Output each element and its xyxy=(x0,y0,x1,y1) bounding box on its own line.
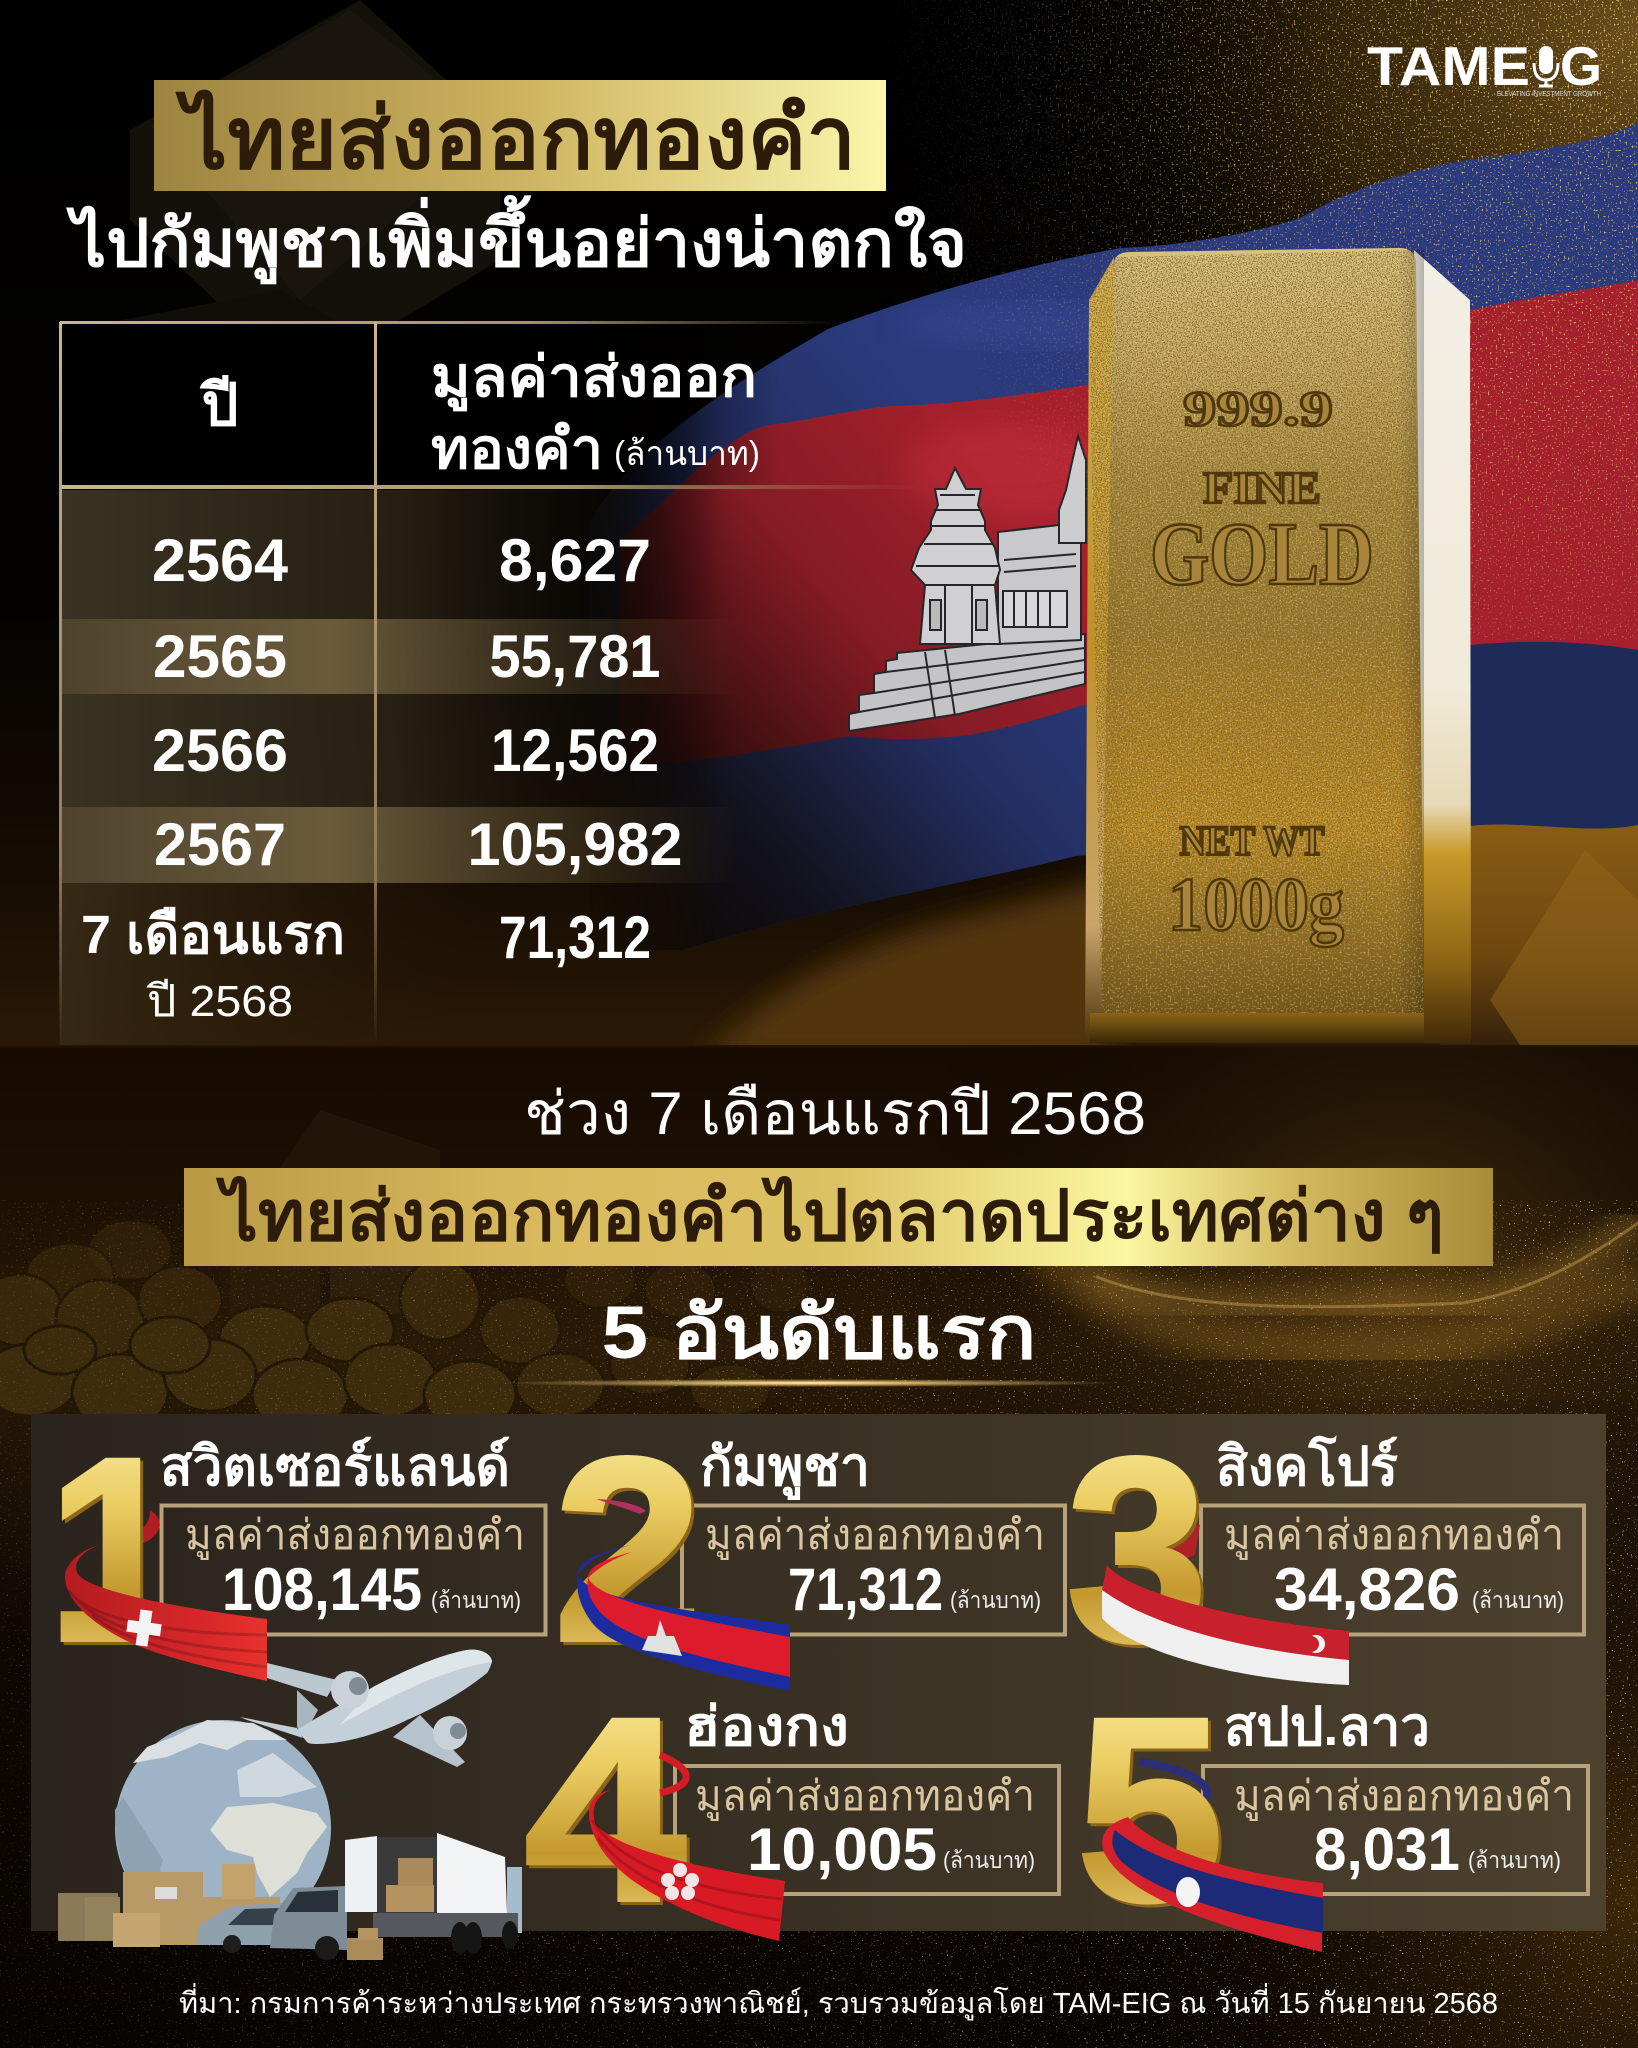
rank 2 Cambodia: 2 xyxy=(553,1403,703,1696)
logo TAMEIG: G xyxy=(1560,35,1602,97)
bar stamp text: GOLD xyxy=(1150,505,1374,604)
gold dust lower xyxy=(0,1200,1638,2048)
illustration: globe, plane, cargo and trucks xyxy=(58,1650,522,1960)
divider glow xyxy=(500,1379,1120,1387)
bar stamp text: NET WT xyxy=(1180,819,1324,865)
rank 1 Switzerland xyxy=(47,1403,546,1699)
logo TAMEIG xyxy=(1367,35,1602,98)
row first 7 months 2568 xyxy=(81,904,651,1026)
red field xyxy=(620,280,1638,765)
rank 1 Switzerland: 108,145 xyxy=(222,1556,422,1623)
row 2565: 2565 xyxy=(153,623,287,690)
source note: ที่มา: กรมการค้าระหว่างประเทศ กระทรวงพาณิชย์, รวบรวมข้อมูลโดย TAM-EIG ณ วันที่ 15 กันยายน 2568 xyxy=(179,1983,1498,2021)
rank 5 Laos: 5 xyxy=(1079,1666,1227,1959)
cardboard boxes xyxy=(58,1864,280,1947)
table header: ปี xyxy=(199,373,238,438)
van xyxy=(270,1886,347,1960)
rank 5 Laos: 8,031 xyxy=(1314,1816,1460,1883)
table header: ทองคำ xyxy=(431,417,603,480)
rank 5 Laos xyxy=(1076,1663,1588,1959)
row 2564: 8,627 xyxy=(499,527,651,594)
row 2566: 2566 xyxy=(152,717,288,784)
wave light on right xyxy=(1045,1223,1638,1350)
globe xyxy=(115,1720,331,1936)
rank 1 Switzerland: (ล้านบาท) xyxy=(431,1587,521,1613)
row first 7 months 2568: ปี 2568 xyxy=(146,977,293,1026)
rank 4 Hong Kong: (ล้านบาท) xyxy=(943,1847,1035,1873)
row 2566: 12,562 xyxy=(491,717,659,784)
row 2564 xyxy=(152,527,651,594)
rank 4 Hong Kong: ฮ่องกง xyxy=(684,1697,849,1757)
rank 3 Singapore xyxy=(1066,1403,1584,1699)
rank 2 Cambodia: มูลค่าส่งออกทองคำ xyxy=(705,1511,1045,1560)
rank 4 Hong Kong: 10,005 xyxy=(747,1816,937,1883)
row 2567: 2567 xyxy=(154,811,286,878)
ghost gold bars in lower background xyxy=(230,1110,440,1320)
rank 2 Cambodia: 2 xyxy=(556,1406,706,1699)
airplane xyxy=(240,1650,492,1767)
gold bar 1000g xyxy=(1085,246,1471,1043)
gold dust top right xyxy=(880,0,1638,640)
rank 1 Switzerland: 1 xyxy=(47,1403,184,1696)
rank 2 Cambodia: 71,312 xyxy=(788,1556,943,1623)
row 2564: 2564 xyxy=(152,527,289,594)
row 2567 xyxy=(154,811,682,878)
rank 4 Hong Kong: 4 xyxy=(527,1666,691,1959)
subtitle: ไปกัมพูชาเพิ่มขึ้นอย่างน่าตกใจ xyxy=(66,194,967,285)
coins background xyxy=(0,1220,810,1431)
small car xyxy=(197,1903,287,1953)
row first 7 months 2568: 7 เดือนแรก xyxy=(81,905,345,965)
Cambodian flag xyxy=(590,123,1638,950)
row 2566 xyxy=(152,717,659,784)
rank 1 Switzerland: มูลค่าส่งออกทองคำ xyxy=(185,1511,525,1560)
rank 1 Switzerland: สวิตเซอร์แลนด์ xyxy=(160,1436,510,1497)
row 2565: 55,781 xyxy=(490,623,660,690)
rank 4 Hong Kong xyxy=(524,1663,1059,1959)
table header: มูลค่าส่งออก xyxy=(431,345,757,412)
delivery truck xyxy=(345,1833,522,1960)
row first 7 months 2568: 71,312 xyxy=(499,904,651,971)
logo TAMEIG: TAME xyxy=(1367,35,1530,97)
bar stamp text: FINE xyxy=(1203,462,1321,513)
panel: top 5 markets xyxy=(31,1403,1606,1960)
rank 3 Singapore: 34,826 xyxy=(1274,1556,1460,1623)
temple emblem on flag xyxy=(849,436,1086,731)
table: export value by year xyxy=(59,321,920,1045)
blue field xyxy=(590,123,1638,950)
rank 4 Hong Kong: มูลค่าส่งออกทองคำ xyxy=(695,1772,1035,1821)
rank 3 Singapore: 3 xyxy=(1069,1406,1211,1699)
title: ไทยส่งออกทองคำ xyxy=(175,89,856,187)
rank 2 Cambodia: กัมพูชา xyxy=(700,1437,870,1500)
row 2565 xyxy=(153,623,660,690)
rank 4 Hong Kong: 4 xyxy=(524,1663,688,1956)
rank 3 Singapore: 3 xyxy=(1066,1403,1208,1696)
rank 5 Laos: 5 xyxy=(1076,1663,1224,1956)
rank 3 Singapore: (ล้านบาท) xyxy=(1472,1587,1564,1613)
rank 5 Laos: มูลค่าส่งออกทองคำ xyxy=(1234,1772,1574,1821)
sub heading: first 7 months: ช่วง 7 เดือนแรกปี 2568 xyxy=(524,1080,1146,1147)
rank 2 Cambodia xyxy=(553,1403,1065,1699)
bar stamp text xyxy=(1150,380,1374,947)
table header xyxy=(199,345,760,480)
rank 2 Cambodia: (ล้านบาท) xyxy=(950,1587,1041,1613)
rank 3 Singapore: มูลค่าส่งออกทองคำ xyxy=(1224,1511,1564,1560)
heading: top 5: 5 อันดับแรก xyxy=(602,1291,1036,1374)
rank 5 Laos: (ล้านบาท) xyxy=(1468,1847,1561,1873)
faint gold bars behind title xyxy=(70,0,500,480)
logo TAMEIG: ELEVATING INVESTMENT GROWTH xyxy=(1497,91,1601,98)
rank 1 Switzerland: 1 xyxy=(50,1406,187,1699)
row 2567: 105,982 xyxy=(468,811,682,878)
rank 5 Laos: สปป.ลาว xyxy=(1224,1697,1430,1757)
right lower blue darker xyxy=(1470,642,1638,830)
banner: exports to foreign markets: ไทยส่งออกทองคำไปตลาดประเทศต่าง ๆ xyxy=(215,1175,1444,1255)
pile of gold under bar xyxy=(700,825,1638,1060)
bar stamp text: 1000g xyxy=(1168,863,1344,947)
table header: (ล้านบาท) xyxy=(614,435,760,473)
rank 3 Singapore: สิงคโปร์ xyxy=(1216,1435,1398,1497)
bar stamp text: 999.9 xyxy=(1183,380,1333,436)
